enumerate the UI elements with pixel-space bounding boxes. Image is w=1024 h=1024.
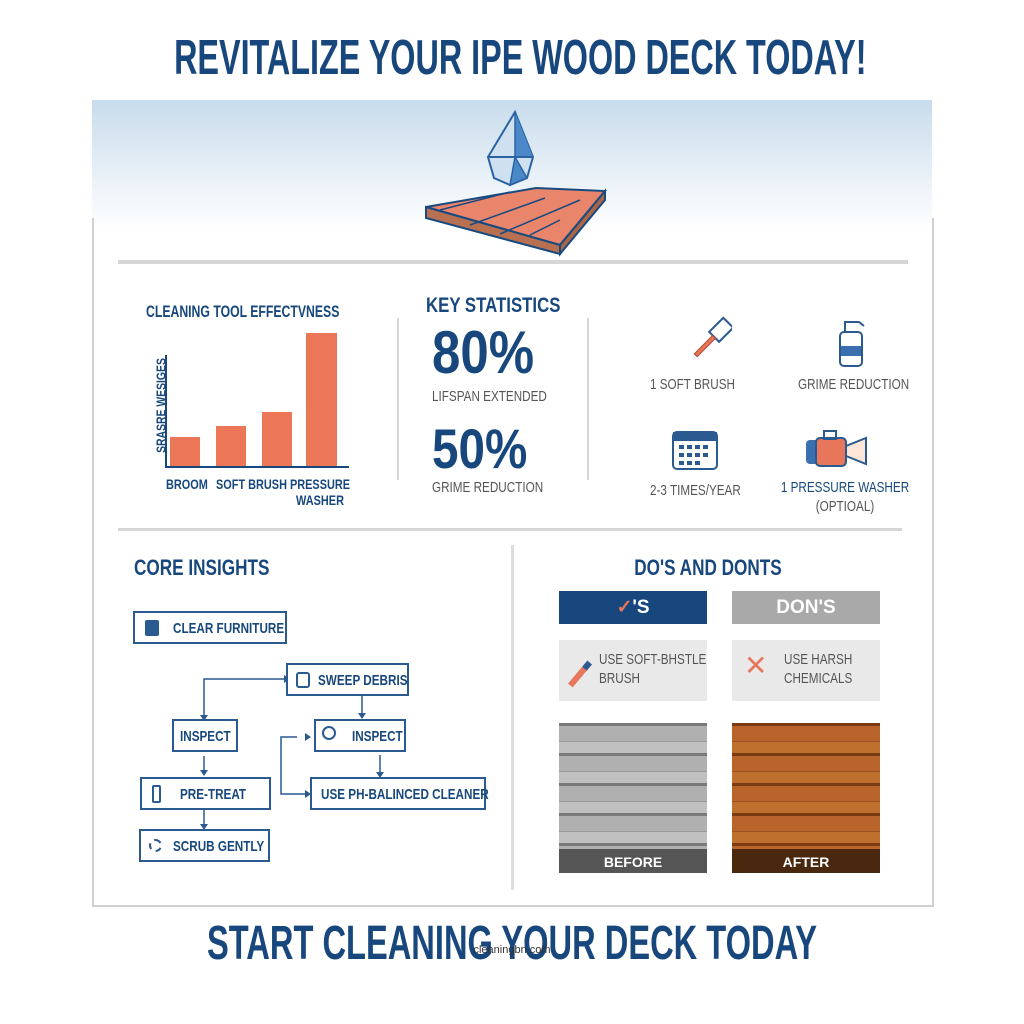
header band <box>92 100 932 230</box>
key statistics: GRIME REDUCTION <box>432 479 543 496</box>
step: sweep debris: SWEEP DEBRIS <box>318 672 408 689</box>
step: inspect right <box>314 719 406 752</box>
step: ph cleaner: USE PH-BALINCED CLEANER <box>321 786 489 803</box>
icon: brush <box>694 316 732 358</box>
step: inspect left: INSPECT <box>180 728 231 745</box>
donts column <box>732 591 880 701</box>
key statistics: 80% <box>432 319 534 386</box>
donts column: USE HARSH <box>784 651 852 668</box>
donts column: CHEMICALS <box>784 670 852 687</box>
icon grid: 1 SOFT BRUSH <box>650 376 735 393</box>
bar chart: WASHER <box>296 492 344 508</box>
icon grid: 1 PRESSURE WASHER <box>781 479 909 496</box>
icon: pressure washer <box>806 430 867 467</box>
icon grid: GRIME REDUCTION <box>798 376 909 393</box>
key statistics: 50% <box>432 417 527 480</box>
icon: water drop on deck <box>425 110 607 257</box>
icon: calendar <box>672 431 718 470</box>
step: scrub gently <box>139 829 270 862</box>
key statistics <box>426 294 560 496</box>
dos column <box>559 591 707 701</box>
icon grid: (OPTIOAL) <box>816 498 874 515</box>
flowchart <box>133 611 489 862</box>
before image <box>559 723 707 873</box>
after image: AFTER <box>783 854 829 870</box>
step: sweep debris <box>286 663 409 696</box>
step: inspect right: INSPECT <box>352 728 403 745</box>
footer call to action: START CLEANING YOUR DECK TODAY <box>207 917 817 970</box>
after image <box>732 723 880 873</box>
dos column: ✓'S <box>616 597 650 618</box>
key statistics: LIFSPAN EXTENDED <box>432 388 547 405</box>
bar chart: PRESSURE <box>290 476 350 492</box>
watermark: cleaningbn.com <box>473 944 551 956</box>
step: ph cleaner <box>310 777 486 810</box>
dos column: BRUSH <box>599 670 640 687</box>
key statistics: KEY STATISTICS <box>426 294 560 317</box>
dos and donts heading: DO'S AND DONTS <box>634 555 782 580</box>
main panel <box>92 218 934 907</box>
donts column: DON'S <box>776 597 836 618</box>
bar chart <box>146 302 350 508</box>
dos column: USE SOFT-BHSTLE <box>599 651 706 668</box>
before image: BEFORE <box>604 854 662 870</box>
step: pre-treat <box>140 777 271 810</box>
step: pre-treat: PRE-TREAT <box>180 786 246 803</box>
donts column: ✕ <box>744 650 767 681</box>
bar chart: BROOM <box>166 476 208 492</box>
title: REVITALIZE YOUR IPE WOOD DECK TODAY! <box>174 31 866 85</box>
bar chart: SRASRE WESIGES <box>154 358 169 453</box>
icon: spray <box>839 321 865 367</box>
bar chart: CLEANING TOOL EFFECTVNESS <box>146 302 339 321</box>
core insights heading: CORE INSIGHTS <box>134 555 269 580</box>
bar chart: SOFT BRUSH <box>216 476 287 492</box>
step: clear furniture: CLEAR FURNITURE <box>173 620 284 637</box>
step: clear furniture <box>133 611 287 644</box>
icon grid: 2-3 TIMES/YEAR <box>650 482 741 499</box>
icon: small brush <box>568 661 592 687</box>
step: scrub gently: SCRUB GENTLY <box>173 838 264 855</box>
icon grid <box>650 316 909 515</box>
step: inspect left <box>172 719 238 752</box>
